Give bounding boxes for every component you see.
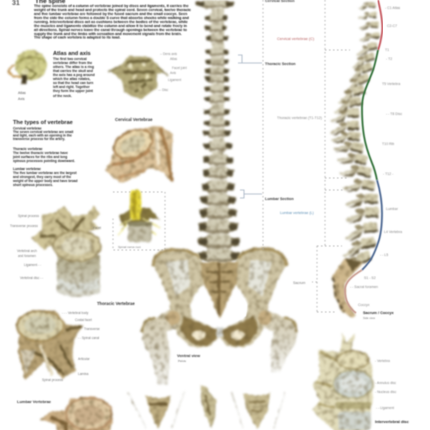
illustration: three sacrum views bbox=[128, 385, 285, 429]
bracket: thoracic section marker bbox=[238, 55, 262, 63]
labels: side view spine: Lumbar bbox=[386, 207, 399, 211]
spinal cord: cervical (red) bbox=[378, 0, 382, 50]
illustration: atlas axis joint bbox=[108, 56, 168, 99]
section labels: Thoracic Section bbox=[265, 62, 296, 66]
labels: lumbar vertebra: Vertebral arch bbox=[17, 249, 37, 253]
text block: types of vertebrae: The five lumbar vertebrae are the largest bbox=[13, 171, 77, 175]
labels: side view spine: C2-C7 bbox=[387, 24, 397, 28]
labels: vertebrae with disc: - Nucleus disc bbox=[375, 390, 397, 394]
illustration: side view spine bbox=[330, 0, 382, 318]
labels: thoracic vertebra: Transverse bbox=[84, 327, 100, 331]
text block: atlas and axis: the axis has a peg around bbox=[53, 73, 95, 77]
dotted frame bbox=[113, 192, 165, 250]
labels: thoracic vertebra: - - Spinal canal bbox=[78, 336, 100, 340]
illustration: vertebrae with disc, lower right bbox=[312, 333, 373, 430]
labels: thoracic vertebra: Spinal process bbox=[42, 378, 63, 382]
label: pelvis view: Pelvis bbox=[178, 359, 187, 363]
labels: atlas axis joint: --- Disc bbox=[158, 88, 169, 92]
illustration: atlas and axis bbox=[9, 50, 47, 84]
labels: lumbar vertebra: Facet bbox=[93, 226, 101, 230]
atlas labels: Atlas bbox=[18, 91, 26, 95]
heading: vertebrae with disc: Intervertebral disc bbox=[375, 419, 410, 424]
label: spinal cord box: Spinal nerve root bbox=[118, 245, 141, 249]
text block: types of vertebrae: joint surfaces for the ribs and long bbox=[12, 155, 67, 159]
spinal cord: sacral (pink) bbox=[345, 270, 362, 313]
labels: vertebrae with disc: - Annulus disc bbox=[375, 381, 396, 385]
text block: types of vertebrae: and strongest, they carry most of the bbox=[13, 175, 71, 179]
femurs bbox=[142, 310, 297, 385]
text block: types of vertebrae: short spinous processes. bbox=[13, 183, 53, 187]
labels: side view spine bbox=[350, 6, 402, 307]
labels: side view spine: T5 Vertebra bbox=[382, 82, 400, 86]
labels: thoracic vertebra: Articular bbox=[78, 357, 91, 361]
sacrum back view bbox=[243, 393, 270, 429]
label: pelvis view bbox=[177, 353, 201, 363]
illustration: thoracic vertebra bbox=[17, 310, 83, 380]
labels: side view spine: Coccyx bbox=[358, 303, 370, 307]
atlas labels bbox=[18, 91, 26, 101]
intro paragraph: supply the trunk and the limbs with sensation and movement signals from the brain. bbox=[34, 32, 182, 36]
intro paragraph: and five lumbar vertebrae are followed by the fused sacrum and the small coccyx. Seen bbox=[34, 12, 188, 16]
text block: types of vertebrae: Lumbar vertebrae bbox=[13, 167, 41, 171]
text block: types of vertebrae: transverse process for the artery. bbox=[13, 137, 65, 141]
labels: side view spine: - C1 Atlas bbox=[385, 6, 400, 10]
illustration: lower lumbar vertebra bbox=[40, 396, 113, 430]
labels: lumbar vertebra: Vertebral disc - - bbox=[20, 276, 43, 280]
labels: side view spine: T10 Rib bbox=[382, 142, 394, 146]
sacrum bbox=[200, 262, 238, 319]
right femur bbox=[260, 310, 297, 372]
intro paragraph: weight of the trunk and head and protects the spinal cord. Seven cervical, twelve thoracic bbox=[33, 8, 191, 12]
intro paragraph: The spine consists of a column of vertebrae joined by discs and ligaments, it carries the bbox=[34, 4, 189, 8]
text block: atlas and axis: that carries the skull and bbox=[53, 69, 93, 73]
labels: atlas axis joint: Axis bbox=[170, 71, 176, 75]
labels: side view spine: T1 bbox=[385, 48, 389, 52]
text block: types of vertebrae: The seven cervical vertebrae are small bbox=[13, 130, 73, 134]
text block: atlas and axis: The first two cervical bbox=[53, 57, 87, 61]
labels: atlas axis joint: Ligament bbox=[168, 78, 181, 82]
text block: types of vertebrae: weight of the upper body and have broad bbox=[12, 179, 77, 183]
text panel: the spine introduction bbox=[12, 0, 191, 40]
intro paragraph: The shape of each vertebra is adapted to its load. bbox=[34, 36, 120, 40]
text block: types of vertebrae: Cervical vertebrae bbox=[13, 126, 42, 130]
labels: atlas axis joint: -- Dens axis bbox=[160, 52, 177, 56]
label: pelvis view: Ventral view bbox=[177, 353, 201, 358]
faint pelvic outline bbox=[128, 392, 285, 428]
labels: lumbar vertebra: and foramen bbox=[18, 254, 36, 258]
illustration: pelvis bbox=[153, 249, 286, 348]
labels: side view spine: - T2 bbox=[386, 57, 392, 61]
top-left logo mark: 31 bbox=[12, 0, 20, 7]
right pubic ring bbox=[222, 316, 258, 346]
text block: atlas and axis: left and right. Together bbox=[53, 85, 90, 89]
text block: atlas and axis: so that the head can turn bbox=[53, 81, 93, 85]
intro paragraph: running. Intervertebral discs act as cushions between the bodies of the vertebrae, while bbox=[34, 20, 188, 24]
labels: vertebrae with disc bbox=[375, 359, 397, 410]
heading: cervical vertebrae: Cervical Vertebrae bbox=[115, 117, 153, 122]
section labels: Lumbar Section bbox=[265, 197, 294, 201]
labels: vertebrae with disc: - - Ligament bbox=[376, 406, 394, 410]
labels: thoracic vertebra: Lamina bbox=[78, 372, 89, 376]
text block: types of vertebrae: spinous processes pointing downward. bbox=[13, 159, 75, 163]
intro paragraph bbox=[33, 4, 191, 40]
spine column backing bbox=[212, 0, 224, 270]
intro paragraph: all directions. Spinal nerves leave the canal through openings between the vertebrae to bbox=[34, 28, 188, 32]
text block: types of vertebrae: The twelve thoracic vertebrae have bbox=[13, 151, 68, 155]
section labels: Cervical vertebrae (C) bbox=[277, 37, 315, 41]
heading: types of vertebrae: The types of vertebrae bbox=[13, 120, 73, 126]
heading: thoracic vertebrae: Thoracic Vertebrae bbox=[97, 301, 135, 306]
text block: atlas and axis: vertebrae differ from the bbox=[53, 61, 92, 65]
heading: sacrum and coccyx: Sacrum / Coccyx bbox=[363, 311, 394, 315]
atlas labels: Axis bbox=[18, 97, 25, 101]
left pubic ring bbox=[180, 316, 218, 346]
heading: lumbar vertebrae: Lumbar Vertebrae bbox=[17, 399, 52, 404]
left hip bone bbox=[153, 250, 219, 348]
section labels: Sacrum bbox=[293, 281, 305, 285]
labels: side view spine: S1 - S2 bbox=[364, 276, 376, 280]
labels: thoracic vertebra: Costal facet bbox=[75, 318, 92, 322]
labels: side view spine: - - T8 Disc bbox=[386, 112, 402, 116]
labels: lumbar vertebra bbox=[10, 214, 101, 280]
labels: lumbar vertebra: Transverse process bbox=[10, 224, 38, 228]
label: sacral note: Side view bbox=[363, 316, 376, 320]
text block: atlas and axis: of the neck. bbox=[53, 94, 72, 98]
intro paragraph: the muscles and ligaments stabilize the column and allow it to bend and rotate freely in bbox=[34, 24, 188, 28]
bracket: lumbar section marker bbox=[240, 190, 262, 198]
labels: side view spine: L4 Vertebra bbox=[384, 230, 402, 234]
text block: atlas and axis: others. The atlas is a ring bbox=[53, 65, 94, 69]
labels: lumbar vertebra: Spinal process bbox=[18, 214, 39, 218]
labels: side view spine: - T12 - bbox=[383, 172, 394, 176]
right hip bone bbox=[219, 249, 286, 348]
dotted guide lines bbox=[263, 0, 350, 312]
section labels bbox=[265, 0, 322, 285]
text block: types of vertebrae: and light, each with an opening in the bbox=[13, 134, 72, 138]
sacrum front view bbox=[145, 396, 171, 429]
spinal cord: thoracic (green) bbox=[362, 50, 378, 180]
text block: types of vertebrae bbox=[12, 126, 77, 187]
labels: thoracic vertebra bbox=[42, 311, 100, 382]
labels: side view spine: - - L5 bbox=[380, 253, 388, 257]
illustration: spinal cord box bbox=[113, 190, 165, 250]
section labels: Thoracic vertebrae (T1-T12) bbox=[277, 116, 322, 120]
text block: atlas and axis: they form the upper joint bbox=[53, 89, 94, 93]
text block: atlas and axis bbox=[52, 57, 95, 98]
illustration: cervical vertebra bbox=[105, 124, 173, 183]
heading: atlas and axis: Atlas and axis bbox=[53, 51, 91, 57]
labels: atlas axis joint bbox=[158, 52, 187, 92]
section labels: Lumbar vertebrae (L) bbox=[280, 211, 314, 215]
text block: atlas and axis: which the atlas rotates, bbox=[52, 77, 91, 81]
illustration: lumbar vertebra with disc bbox=[32, 206, 101, 297]
labels: lumbar vertebra: Ligament - - bbox=[24, 263, 41, 267]
labels: side view spine: - - Sacral foramen bbox=[350, 285, 378, 289]
side sacrum and coccyx bbox=[332, 258, 364, 318]
illustration: central spine bbox=[195, 0, 241, 270]
intro paragraph: from the side the column forms a double S curve that absorbs shocks while walking and bbox=[34, 16, 190, 20]
left femur bbox=[142, 310, 180, 385]
labels: thoracic vertebra: - - - Vertebral body bbox=[62, 311, 89, 315]
labels: atlas axis joint: Facet joint bbox=[172, 66, 187, 70]
sacrum side view bbox=[200, 385, 216, 428]
labels: vertebrae with disc: - Vertebra bbox=[375, 359, 390, 363]
pubic symphysis bbox=[216, 327, 223, 337]
pelvic openings bbox=[193, 295, 247, 321]
text block: types of vertebrae: Thoracic vertebrae bbox=[13, 147, 43, 151]
labels: atlas axis joint: Atlas bbox=[170, 57, 177, 61]
spinal cord: lumbar (blue) bbox=[362, 180, 382, 270]
